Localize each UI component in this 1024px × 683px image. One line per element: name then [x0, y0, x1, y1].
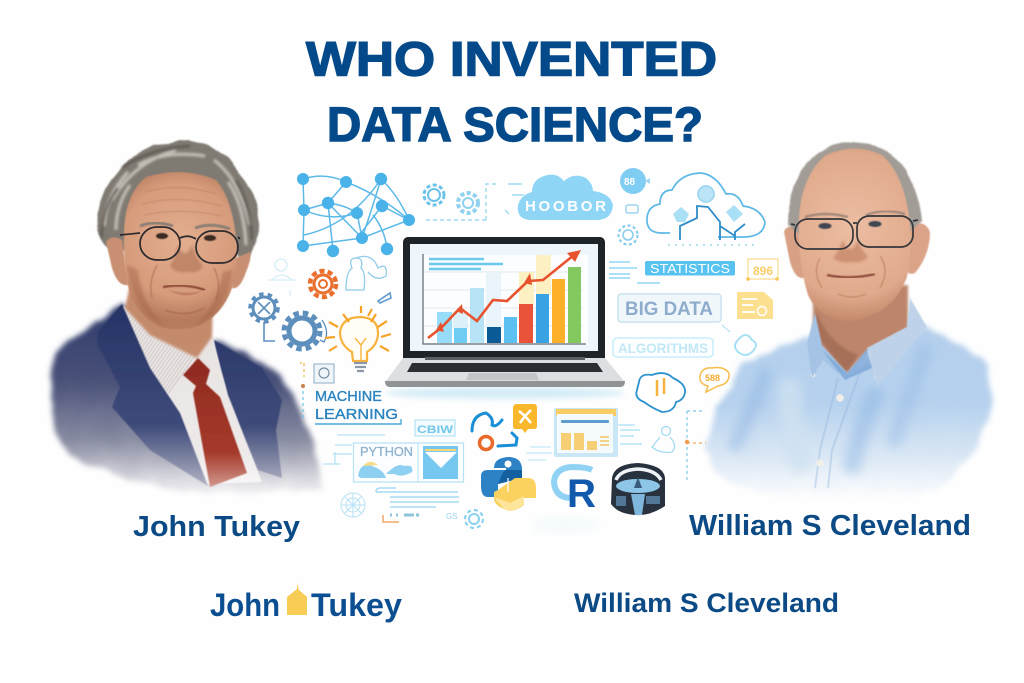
icon: yellow document [737, 292, 773, 319]
name: John Tukey: John Tukey [133, 511, 300, 543]
icon: yellow chat tile [513, 404, 537, 433]
icon: yellow chart box: 896 [753, 264, 773, 278]
title: DATA SCIENCE? [327, 99, 703, 152]
trackpad [466, 373, 539, 380]
glasses [120, 227, 240, 263]
icon: hand gesture [636, 373, 685, 412]
icon: network graph [297, 173, 415, 257]
icon: R logo: R [567, 472, 596, 516]
buttons [811, 353, 880, 467]
envelope [423, 446, 458, 479]
chart axes [423, 254, 586, 344]
keyboard [407, 363, 603, 372]
icon: small tag box: CBIW [417, 424, 454, 436]
chart gridlines [423, 272, 583, 326]
sun [363, 462, 378, 466]
hair highlights [104, 150, 250, 245]
laptop shadow [385, 387, 625, 399]
keyboard hinge [425, 357, 585, 360]
icon: radar target [341, 493, 365, 517]
icon: small gear bottom: GS [446, 512, 458, 521]
nasolabial lines [151, 265, 219, 314]
logo: John Tukey: John [210, 587, 280, 623]
neck shadow [813, 312, 858, 373]
label: statistics: STATISTICS [650, 262, 730, 276]
icon: faint person [268, 259, 296, 296]
icon: lines beside statistics [609, 262, 660, 283]
background bars [453, 255, 551, 329]
chart legend lines [429, 259, 503, 269]
side hair [788, 142, 922, 234]
jacket [50, 303, 322, 494]
icon: yellow speech bubble: 588 [705, 373, 720, 383]
title: WHO INVENTED [306, 34, 717, 86]
nose [170, 245, 203, 272]
panel: python card [354, 443, 464, 482]
smile lines [816, 256, 885, 297]
icon: orange gear [310, 271, 336, 297]
label: machine learning: MACHINE [315, 389, 382, 405]
shirt folds [735, 350, 925, 465]
icon: R logo [554, 467, 596, 516]
eyebrows [805, 211, 905, 217]
icon: small gear top center [618, 205, 638, 244]
left collar [807, 313, 847, 378]
icon: dashed connector left [300, 363, 305, 420]
network nodes [297, 173, 415, 257]
cheek shadow [127, 265, 232, 326]
icon: outline cloud [647, 173, 765, 245]
python label: PYTHON [360, 445, 413, 459]
text lines bottom left [376, 488, 459, 522]
icon: person with coin [346, 256, 391, 303]
laptop [385, 237, 625, 399]
laptop keyboard deck [386, 358, 624, 381]
right collar [867, 298, 927, 387]
eyebrows [140, 223, 230, 229]
placket [815, 372, 860, 488]
icon: recycle arrows [472, 413, 517, 450]
name: William S Cleveland: William S Cleveland [689, 510, 971, 542]
icon: small framed picture [314, 364, 334, 383]
label: algorithms: ALGORITHMS [618, 341, 708, 356]
right lapel [214, 340, 282, 478]
laptop base [385, 381, 625, 387]
panel: yellow dashboard card [526, 408, 642, 460]
icon: light bulb [325, 306, 391, 371]
ears [106, 237, 128, 285]
hair dark streaks [102, 146, 252, 240]
bar chart [437, 267, 581, 343]
left lapel [97, 304, 208, 486]
icon: python logo [481, 457, 536, 511]
logo text: William S Cleveland: William S Cleveland [574, 588, 839, 618]
smile [827, 274, 875, 277]
laptop lid [403, 237, 605, 365]
icon: vr headset device [611, 463, 665, 515]
hair [97, 140, 259, 264]
trend arrow [428, 250, 581, 338]
icon: faint swirl [722, 325, 756, 355]
logo house icon [287, 583, 307, 615]
label: big data: BIG DATA [625, 299, 713, 320]
forehead wrinkles [142, 187, 222, 216]
icon: yellow speech bubble [700, 368, 729, 392]
label: machine learning: LEARNING [315, 407, 398, 423]
icon: blue cloud with text [518, 175, 613, 220]
label: big data [618, 294, 721, 322]
icon: blue cloud with text: HOOBOR [525, 198, 606, 215]
ears [784, 227, 806, 278]
glasses [791, 216, 918, 249]
nose [833, 240, 868, 262]
icon: small gear bottom [446, 510, 483, 528]
shirt body [707, 326, 990, 498]
eyes [156, 233, 216, 241]
icon: small brain circle: 88 [624, 177, 636, 188]
icon: small tag box [415, 420, 455, 436]
neck [813, 285, 908, 373]
eyes [818, 221, 882, 229]
face [124, 172, 237, 329]
screen [410, 244, 598, 351]
title [306, 34, 717, 152]
faint watercolor wash [531, 519, 599, 531]
neck [125, 285, 213, 358]
icon: steel gears [250, 294, 327, 349]
portrait: John Tukey [50, 140, 322, 494]
shirt [120, 306, 262, 484]
label: machine learning [315, 389, 401, 424]
icon: small brain circle [620, 168, 650, 194]
lower lip [168, 290, 202, 295]
shirt stripes [120, 306, 197, 395]
portrait: William S Cleveland [707, 142, 990, 498]
icon: outline gears top [424, 184, 524, 220]
logo: John Tukey [210, 583, 402, 623]
wave art [358, 465, 412, 478]
icon: connector lines left of python [323, 435, 385, 464]
mini chart [561, 433, 597, 450]
mouth [163, 286, 205, 290]
logo: John Tukey: Tukey [311, 587, 402, 623]
tie [183, 358, 247, 487]
icon: dashed connector right [685, 411, 706, 482]
icon: yellow chart box [746, 259, 779, 281]
collar inner shadow [822, 349, 872, 380]
icon: faint figure [652, 426, 675, 452]
face [799, 148, 911, 321]
